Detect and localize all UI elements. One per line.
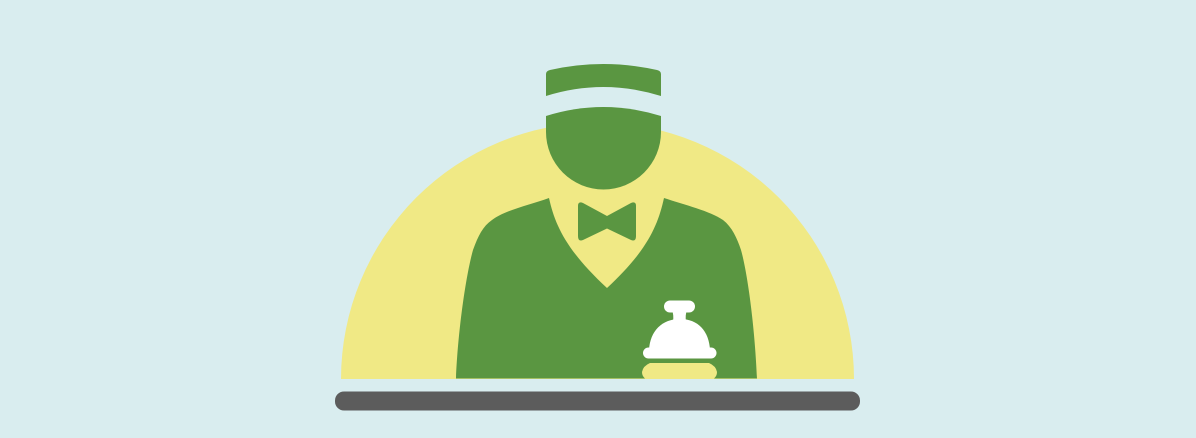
yellow semicircle backdrop [341,123,854,379]
icon: service bell [642,300,717,378]
bell rim [643,348,716,358]
icon: bellhop figure [456,64,757,378]
bow tie [578,202,636,240]
bell stem [672,310,687,322]
bell base [642,363,717,378]
bell dome [649,319,710,350]
bell knob [664,300,695,312]
torso [456,198,757,378]
hat [546,64,661,96]
desk bar [335,392,860,410]
head [546,107,661,189]
